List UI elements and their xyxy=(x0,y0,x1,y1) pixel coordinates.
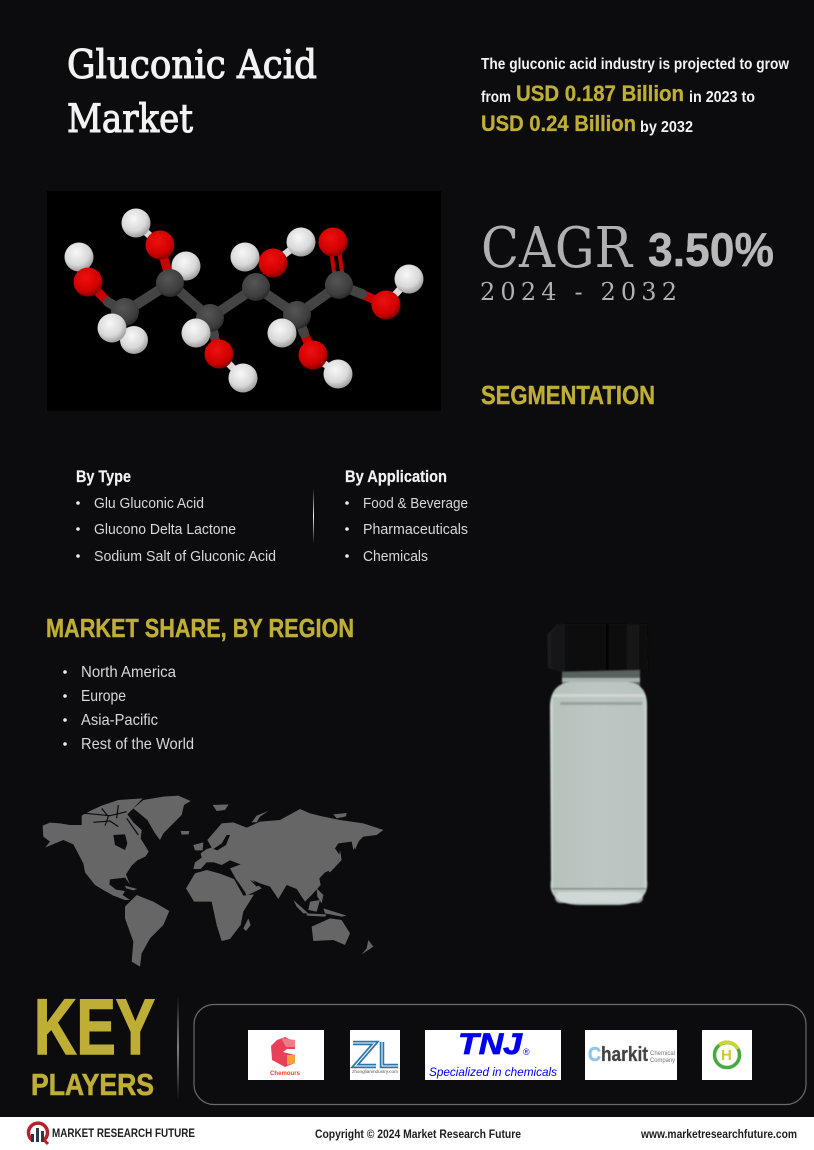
market size summary: USD 0.187 Billion xyxy=(516,81,684,106)
logo: Charkit: harkit xyxy=(601,1044,648,1066)
market size summary: USD 0.24 Billion xyxy=(481,111,636,136)
key players panel xyxy=(194,1004,806,1104)
logo: Chemours xyxy=(248,1030,324,1080)
logo: TNJ: Specialized in chemicals xyxy=(429,1065,557,1079)
atoms front xyxy=(64,208,424,392)
logo: Chemours: Chemours xyxy=(270,1070,300,1077)
arctic channels xyxy=(85,805,138,835)
vial neck xyxy=(562,670,640,692)
segmentation by application: Food & Beverage xyxy=(363,495,468,512)
footer bar xyxy=(0,1117,814,1150)
region list: Asia-Pacific xyxy=(81,712,158,729)
title: Market xyxy=(67,97,193,142)
market size summary: by 2032 xyxy=(640,119,693,136)
vial body xyxy=(550,682,647,905)
region list: Rest of the World xyxy=(81,736,194,753)
key players heading xyxy=(31,982,155,1102)
footer logo: MARKET RESEARCH FUTURE xyxy=(52,1126,195,1140)
logo: TNJ: TNJ xyxy=(458,1028,523,1061)
region list: Europe xyxy=(81,688,126,705)
region list xyxy=(63,664,194,753)
CAGR: CAGR xyxy=(481,216,634,281)
footer logo xyxy=(28,1123,195,1144)
segmentation by application: Pharmaceuticals xyxy=(363,521,468,538)
segmentation by type: By Type xyxy=(76,467,131,486)
logo: H mark: H xyxy=(721,1047,732,1064)
region list: North America xyxy=(81,664,176,681)
logo: ZL: zhonglianindustry.com xyxy=(352,1069,398,1074)
logo: Charkit: Chemical xyxy=(650,1051,675,1057)
segmentation by type: Sodium Salt of Gluconic Acid xyxy=(94,548,276,565)
CAGR xyxy=(480,216,774,306)
logo: ZL xyxy=(350,1030,400,1080)
segmentation by application: Chemicals xyxy=(363,548,428,565)
map water cut-outs xyxy=(113,834,260,894)
vial image xyxy=(547,624,648,905)
molecule image xyxy=(47,191,441,411)
title xyxy=(67,43,317,142)
segmentation by application xyxy=(345,467,468,565)
molecule bonds xyxy=(79,223,409,378)
logo: H mark xyxy=(702,1030,752,1080)
heading: market share by region: MARKET SHARE, BY REGION xyxy=(46,613,354,643)
key players heading: KEY xyxy=(34,982,155,1071)
segmentation by type xyxy=(76,467,276,565)
segmentation by type: Glucono Delta Lactone xyxy=(94,521,236,538)
atoms carbon xyxy=(111,269,353,332)
CAGR: 3.50% xyxy=(648,223,774,276)
segmentation by application: By Application xyxy=(345,467,447,486)
heading: segmentation: SEGMENTATION xyxy=(481,380,655,410)
copyright: Copyright © 2024 Market Research Future xyxy=(315,1127,521,1141)
segmentation by type: Glu Gluconic Acid xyxy=(94,495,204,512)
CAGR: 2024 - 2032 xyxy=(480,278,677,306)
logo: Charkit: Company xyxy=(650,1058,675,1064)
market size summary xyxy=(481,56,789,136)
atoms back xyxy=(120,228,316,354)
logo: TNJ xyxy=(425,1028,561,1080)
logo: Charkit xyxy=(585,1030,677,1080)
vial cap xyxy=(547,624,648,672)
market size summary: from xyxy=(481,89,511,106)
logo: Charkit: C xyxy=(588,1044,601,1066)
world map xyxy=(43,796,383,967)
key players heading: PLAYERS xyxy=(31,1068,154,1102)
logo: TNJ: ® xyxy=(523,1047,530,1057)
market size summary: in 2023 to xyxy=(689,89,755,106)
title: Gluconic Acid xyxy=(67,43,317,88)
